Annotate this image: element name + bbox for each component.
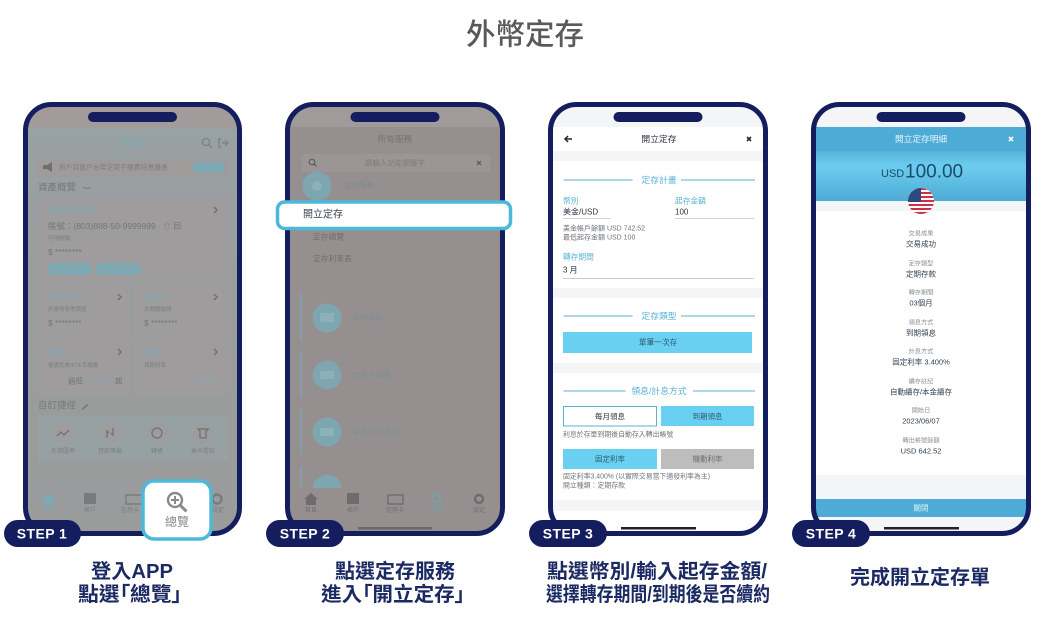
bottom navigation: 首頁 [43,506,55,514]
bottom navigation: 總覽 [431,506,443,514]
announcement bar: 新戶與舊戶台幣定期手續費特惠優惠 [59,162,168,172]
shortcuts panel [51,427,215,454]
search bar [308,158,482,167]
header icons [202,138,228,148]
sub-menu links [313,232,352,264]
investment card: 過低 [68,376,83,386]
section: interest method: 機動利率 [692,454,723,464]
bottom navigation: 帳戶 [347,506,359,514]
details list: 交易成功 [906,238,936,248]
section: deposit plan: 定存計畫 [641,174,677,185]
foreign currency card: 折臺幣參考價值 [48,305,87,313]
details list: 2023/06/07 [902,416,940,426]
notch [876,112,966,122]
step 2 caption: 進入「開立定存」 [321,582,465,606]
notch [88,112,177,122]
bottom navigation: 信用卡 [386,506,404,514]
screen header: 開立定存 [641,133,677,144]
step 4 badge: STEP 4 [806,526,856,542]
announcement bar [43,162,225,173]
callout: open deposit highlight: 開立定存 [303,208,343,220]
investment card: 複委託美/ETF手續費 [48,361,99,369]
step 1 caption: 登入APP [91,560,173,583]
notch [350,112,440,122]
section heading: asset overview: 資產概覽 [38,182,77,194]
screen header: 開立定存明細 [895,133,947,144]
home indicator [621,527,696,530]
section heading: custom shortcuts: 自訂捷徑 [38,400,77,412]
shortcuts panel: 貸款專屬 [98,447,122,455]
home indicator [884,527,959,530]
account card: 新臺幣活儲 [48,204,93,215]
step 2 caption [321,559,465,606]
currency field: 幣別 [563,196,579,206]
step 3 caption [546,559,770,606]
panel: step 4 phone [811,102,1031,536]
amount field [675,196,754,218]
currency field [563,196,611,218]
rollover period field: 轉存期間 [563,252,594,262]
rollover period field [563,252,754,278]
account card: 帳號：(803)888-50-9999999 [48,221,156,231]
service row: fund [300,408,402,455]
bottom navigation: 設定 [473,506,485,514]
details list: 計息方式 [909,348,933,356]
loan card: 0.1% [196,376,219,386]
amount field: 100 [675,208,689,216]
amount banner: USD [881,168,904,180]
title: 外幣定存 [466,18,584,52]
details list: 續存註記 [909,378,933,386]
credit card card [144,292,218,327]
details list: 到期領息 [906,328,936,338]
loan card: 貸款 [144,347,162,357]
shortcuts panel: 轉帳 [151,447,163,455]
section: deposit type: 單筆一次存 [639,337,678,347]
close button [811,499,1031,517]
panel: step 2 phone [285,102,505,536]
details list: 交易成果 [909,230,933,238]
search bar: 請輸入功能關鍵字 [365,158,425,168]
details list [890,230,953,456]
home indicator [358,527,432,530]
service row: fund: 基金/ETF 配息 [353,426,402,436]
details list: 領息方式 [909,318,933,326]
step 4 badge [792,520,870,547]
details list: USD 642.52 [901,446,941,456]
step 3 caption: 點選幣別/輸入起存金額/ [547,559,767,583]
credit card card: $ ******** [144,318,178,328]
amount banner [811,151,1031,201]
step 3 badge: STEP 3 [543,526,593,542]
account card: ⇧ 囙 [163,220,181,230]
details list: 轉出帳號餘額 [902,436,940,444]
foreign currency card [48,292,122,327]
phone frame [288,104,502,534]
bottom navigation: 帳戶 [84,506,96,514]
shortcuts panel: 外幣匯率 [51,447,75,455]
details list: 開始日 [912,406,930,414]
section: interest method: 每月領息 [595,411,625,421]
account card [48,205,218,275]
deposit service row: 定存服務 [344,180,375,190]
step 4 caption: 完成開立定存單 [850,565,990,589]
panel: step 3 phone [548,102,768,536]
foreign currency card: 外幣活存 [48,292,83,302]
deposit service row [302,172,375,200]
screen title: 所有服務 [378,133,413,144]
details list: 轉存期間 [909,288,933,296]
callout: overview tab highlight: 總覽 [165,514,189,529]
section: interest method: 到期領息 [692,411,723,421]
sub-menu links: 定存總覽 [313,232,344,242]
section: interest method: 開立種類：定期存款 [563,480,625,490]
investment card: 起 [115,376,123,386]
bottom navigation [304,493,485,514]
credit card card: 本期應繳額 [144,305,172,313]
service row: credit card [300,352,391,398]
details list: 固定利率 3.400% [892,356,950,366]
callout: overview tab highlight [143,481,211,539]
service row: foreign remittance [300,294,383,341]
bottom navigation [42,493,224,514]
currency field: 美金/USD [563,206,598,216]
service row: foreign remittance: 外幣匯款 [353,312,383,322]
credit card card: 信用卡 [144,292,170,302]
section: interest method: 固定利率 [595,454,625,464]
notch [614,112,702,122]
loan card: 貸款利率 [144,361,167,369]
step 3 caption: 選擇轉存期間/到期後是否續約 [546,583,770,606]
section: interest method [563,385,755,490]
details list: 定期存款 [906,268,936,278]
amount field: 起存金額 [675,196,706,206]
bottom navigation: 設定 [212,506,224,514]
phone frame [26,104,240,534]
step 1 badge: STEP 1 [17,526,67,542]
loan card [144,348,218,384]
section: deposit type: 定存類型 [641,310,677,321]
investment card: 0.15% [86,376,109,386]
account card: $ ******** [48,247,82,257]
service row: credit card: 信用卡額度 [353,370,391,380]
screen header [811,127,1031,151]
balance note: 美金帳戶餘額 USD 742.52 [563,224,645,232]
shortcuts panel: 無卡提款 [191,447,215,455]
foreign currency card: $ ******** [48,318,82,328]
step 1 badge [4,520,81,547]
investment card [48,348,122,384]
step 3 badge [529,520,607,547]
rollover period field: 3 月 [563,266,578,274]
service row: clipped [300,467,342,488]
bottom navigation: 首頁 [305,506,317,514]
details list: 03個月 [909,298,933,308]
details list: 自動續存/本金續存 [890,386,953,396]
section: deposit type [563,310,755,353]
details list: 定存類型 [909,260,933,268]
account card: 可用餘額 [48,234,71,242]
panel: step 1 phone [23,102,242,536]
close button: 關閉 [914,504,928,512]
icon: US flag [908,188,934,214]
balance note [563,224,645,240]
step 1 caption: 點選「總覽」 [78,582,182,606]
section: interest method: 利息於存單到期後自動存入轉出帳號 [563,430,673,438]
step 2 badge: STEP 2 [280,526,330,542]
bottom navigation: 信用卡 [121,506,139,514]
balance note: 最低起存金額 USD 100 [563,232,635,242]
investment card: 投資 [48,347,66,357]
section: interest method: 固定利率3.400% (以實際交易當下適發利率為主) [563,472,710,480]
app logo: iTow [119,134,146,150]
screen header [564,134,752,143]
amount banner: 100.00 [905,162,963,182]
step 2 caption: 點選定存服務 [335,559,455,583]
step 1 caption [78,560,182,606]
phone frame [814,104,1028,534]
section: interest method: 領息/計息方式 [631,385,687,396]
step 2 badge [266,520,344,547]
sub-menu links: 定存利率表 [313,254,352,264]
phone frame [550,104,766,534]
callout: open deposit highlight [278,202,510,228]
